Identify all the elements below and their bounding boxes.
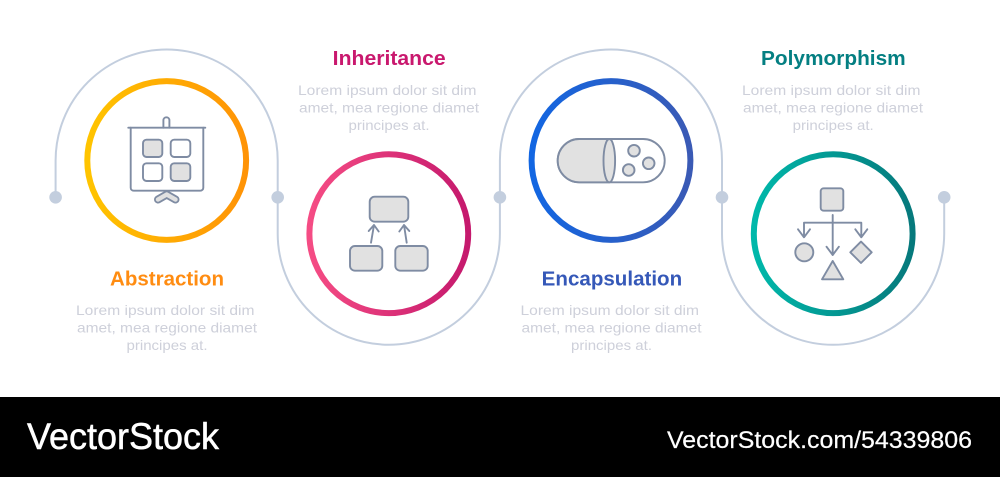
panel: abstraction [76,81,257,353]
footer logo text: VectorStock [27,416,219,457]
connector line with dots [49,49,951,345]
text block: inheritance: Lorem ipsum dolor sit dim [298,82,476,98]
heading: polymorphism: Polymorphism [761,48,906,70]
icon: inheritance diagram [350,197,428,271]
footer url text: VectorStock.com/54339806 [667,427,972,454]
text block: abstraction: amet, mea regione diamet [77,320,257,336]
text block: abstraction: Lorem ipsum dolor sit dim [76,302,254,318]
text block: encapsulation [520,302,702,353]
text block: polymorphism [742,82,923,133]
text block: abstraction: principes at. [126,337,208,353]
icon: presentation board [128,117,205,200]
text block: inheritance: principes at. [348,117,430,133]
heading: encapsulation: Encapsulation [542,269,682,291]
ring: inheritance [309,154,468,313]
text block: inheritance: amet, mea regione diamet [299,100,479,116]
ring: abstraction [87,81,246,240]
ring: encapsulation [532,81,690,240]
panel: inheritance [298,48,479,313]
text block: encapsulation: principes at. [571,337,652,353]
icon: capsule [558,139,665,182]
heading: inheritance: Inheritance [333,48,446,70]
panel: encapsulation [520,81,702,353]
icon: polymorphism diagram [795,188,872,279]
text block: encapsulation: amet, mea regione diamet [522,320,702,336]
text block: polymorphism: amet, mea regione diamet [743,100,923,116]
text block: abstraction [76,302,257,353]
text block: polymorphism: Lorem ipsum dolor sit dim [742,82,920,98]
text block: encapsulation: Lorem ipsum dolor sit dim [520,302,699,318]
heading: abstraction: Abstraction [110,269,224,291]
ring: polymorphism [754,154,913,313]
text block: polymorphism: principes at. [793,117,874,133]
text block: inheritance [298,82,479,133]
footer bar [0,397,1000,477]
panel: polymorphism [742,48,923,313]
